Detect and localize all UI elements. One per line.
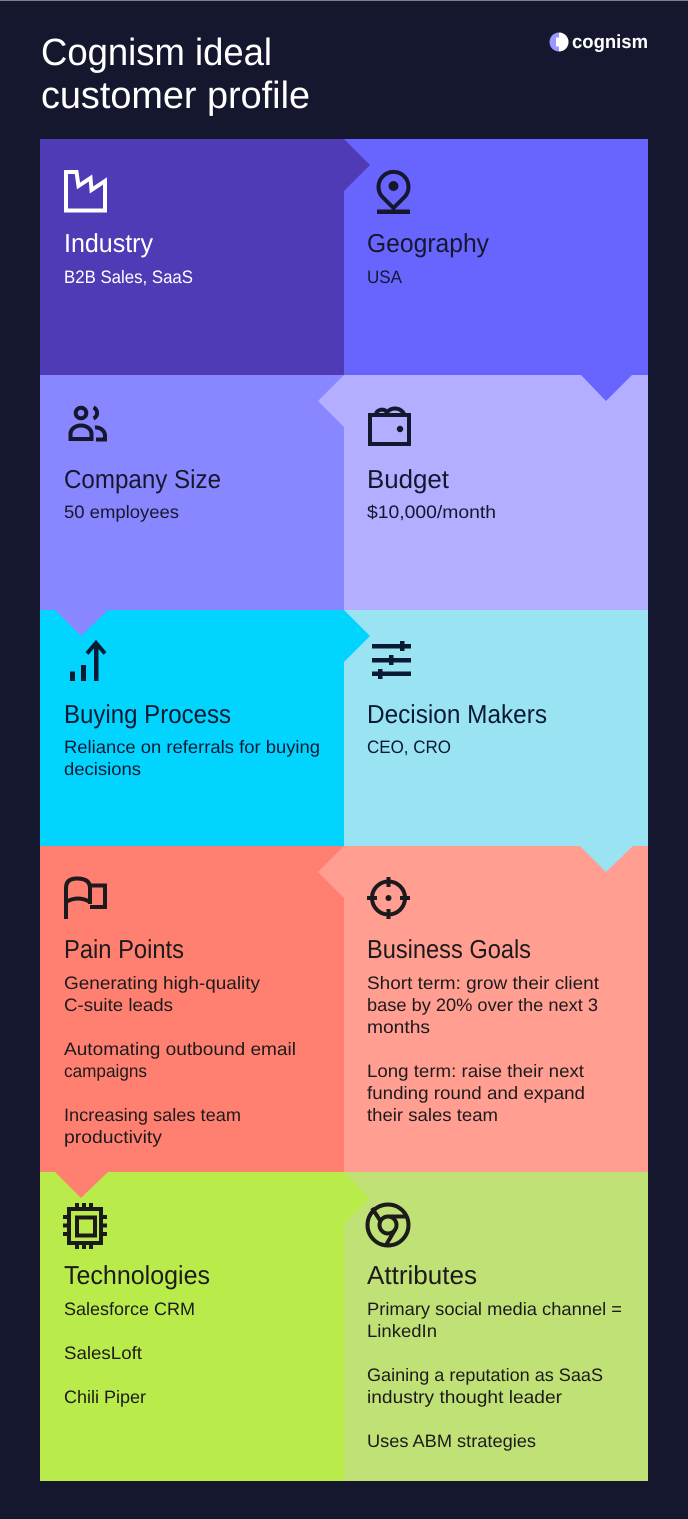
panel: technologies: Technologies [64, 1260, 210, 1290]
panel: attributes: industry thought leader [367, 1387, 562, 1407]
icon: location pin [377, 172, 410, 214]
panel: decision makers: CEO, CRO [367, 737, 451, 757]
panel: pain points: campaigns [64, 1061, 147, 1081]
logo: cognism: cognism [572, 32, 648, 53]
panel: business goals: funding round and expand [367, 1083, 585, 1103]
panel: budget [318, 375, 648, 610]
icon: target [367, 877, 410, 919]
panel: business goals: Business Goals [367, 934, 531, 964]
panel: pain points: Generating high-quality [64, 973, 260, 993]
panel: pain points: Pain Points [64, 934, 184, 964]
panel: attributes: LinkedIn [367, 1321, 437, 1341]
panel: business goals: months [367, 1017, 430, 1037]
panel: technologies [40, 1172, 344, 1481]
panel: pain points: Increasing sales team [64, 1105, 241, 1125]
panel: attributes [344, 1172, 648, 1481]
panel: business goals [318, 846, 648, 1172]
icon: flag [66, 878, 105, 919]
panel: geography: Geography [367, 228, 489, 258]
icon: chip [63, 1203, 107, 1249]
panel: geography [344, 139, 648, 375]
panel: buying process: decisions [64, 759, 141, 779]
panel: attributes: Uses ABM strategies [367, 1431, 536, 1451]
icon: factory [66, 172, 105, 210]
panel: pain points: Automating outbound email [64, 1039, 296, 1059]
panel: decision makers: Decision Makers [367, 699, 547, 729]
icon: chrome [368, 1204, 408, 1246]
title: Cognism ideal [41, 32, 272, 74]
panel: industry: Industry [64, 228, 153, 258]
panel: business goals: base by 20% over the next 3 [367, 995, 598, 1015]
panel: geography: USA [367, 267, 402, 287]
panel: decision makers [344, 610, 648, 846]
icon: rising arrow chart [70, 643, 105, 681]
panel: industry: B2B Sales, SaaS [64, 267, 193, 287]
panel: company size: 50 employees [64, 502, 179, 522]
panel: buying process: Buying Process [64, 699, 231, 729]
panel: company size: Company Size [64, 464, 221, 494]
panel: industry [40, 139, 344, 375]
panel: business goals: Long term: raise their next [367, 1061, 584, 1081]
panel: budget: $10,000/month [367, 502, 496, 522]
icon: sliders [372, 641, 411, 679]
panel: pain points [40, 846, 344, 1172]
panel: attributes: Primary social media channel = [367, 1299, 622, 1319]
panel: buying process: Reliance on referrals for buying [64, 737, 320, 757]
panel: technologies: Salesforce CRM [64, 1299, 195, 1319]
panel: company size [40, 375, 344, 610]
icon: people [70, 408, 105, 440]
panel: technologies: Chili Piper [64, 1387, 146, 1407]
title [41, 32, 310, 117]
title: customer profile [41, 75, 310, 117]
panel: business goals: their sales team [367, 1105, 498, 1125]
panel: attributes: Attributes [367, 1260, 477, 1290]
panel: pain points: C-suite leads [64, 995, 173, 1015]
panel: technologies: SalesLoft [64, 1343, 142, 1363]
panel: buying process [40, 610, 344, 846]
icon: wallet [370, 409, 409, 444]
panel: attributes: Gaining a reputation as SaaS [367, 1365, 603, 1385]
panel: pain points: productivity [64, 1127, 162, 1147]
panel: business goals: Short term: grow their client [367, 973, 599, 993]
panel: budget: Budget [367, 464, 450, 494]
